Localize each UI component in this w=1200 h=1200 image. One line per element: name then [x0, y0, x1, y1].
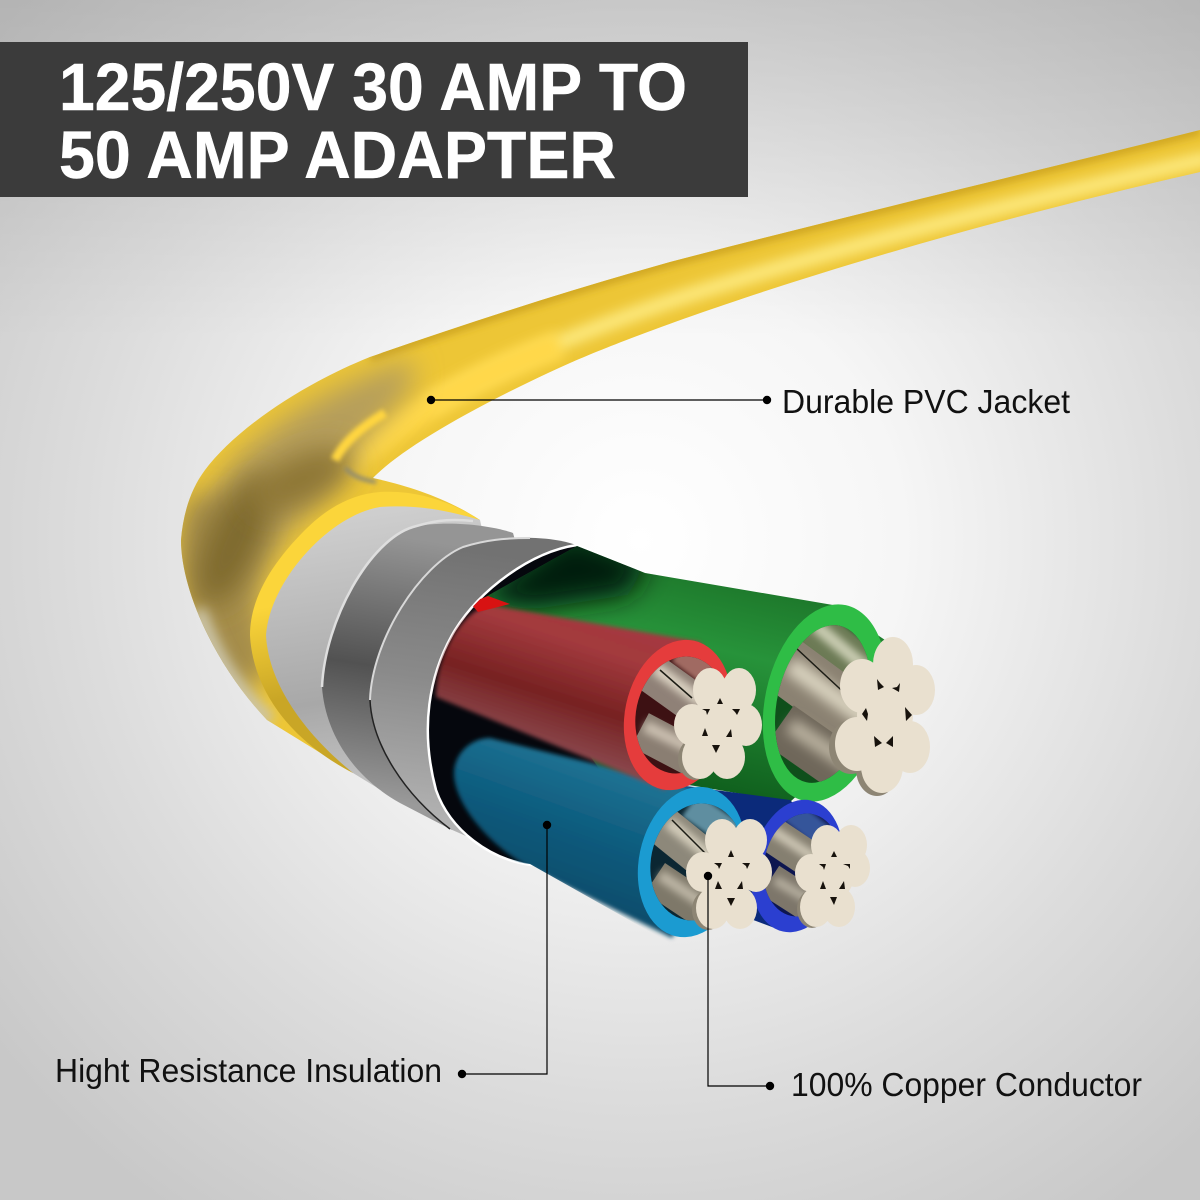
callout: Copper Conductor: 100% Copper Conductor — [791, 1066, 1142, 1103]
gray insulation band 3 — [370, 538, 600, 865]
yellow cut ring — [250, 492, 500, 773]
gray insulation band 1 — [266, 506, 520, 803]
callout: Copper Conductor — [704, 872, 1142, 1103]
callout: Durable PVC Jacket — [427, 383, 1070, 420]
gray insulation band 2 — [322, 524, 560, 830]
blue conductor — [454, 738, 772, 947]
title banner — [0, 42, 748, 197]
dark blue conductor — [680, 786, 870, 932]
red conductor — [436, 596, 762, 800]
title banner: 125/250V 30 AMP TO — [59, 50, 687, 125]
callout: High Resistance Insulation: Hight Resistance Insulation — [55, 1052, 442, 1089]
yellow PVC jacket — [181, 130, 1200, 773]
strand flower blue — [686, 819, 772, 930]
strand flower red — [674, 668, 762, 780]
green strands — [776, 625, 868, 782]
green end ring — [762, 604, 881, 802]
title banner: 50 AMP ADAPTER — [59, 118, 616, 193]
opening interior — [428, 545, 680, 865]
callout: Durable PVC Jacket: Durable PVC Jacket — [782, 383, 1070, 420]
strand flower green — [829, 637, 935, 796]
green conductor — [484, 546, 884, 802]
strand flower dark blue — [795, 825, 870, 928]
callout: High Resistance Insulation — [55, 821, 551, 1089]
cable illustration — [150, 100, 1200, 947]
